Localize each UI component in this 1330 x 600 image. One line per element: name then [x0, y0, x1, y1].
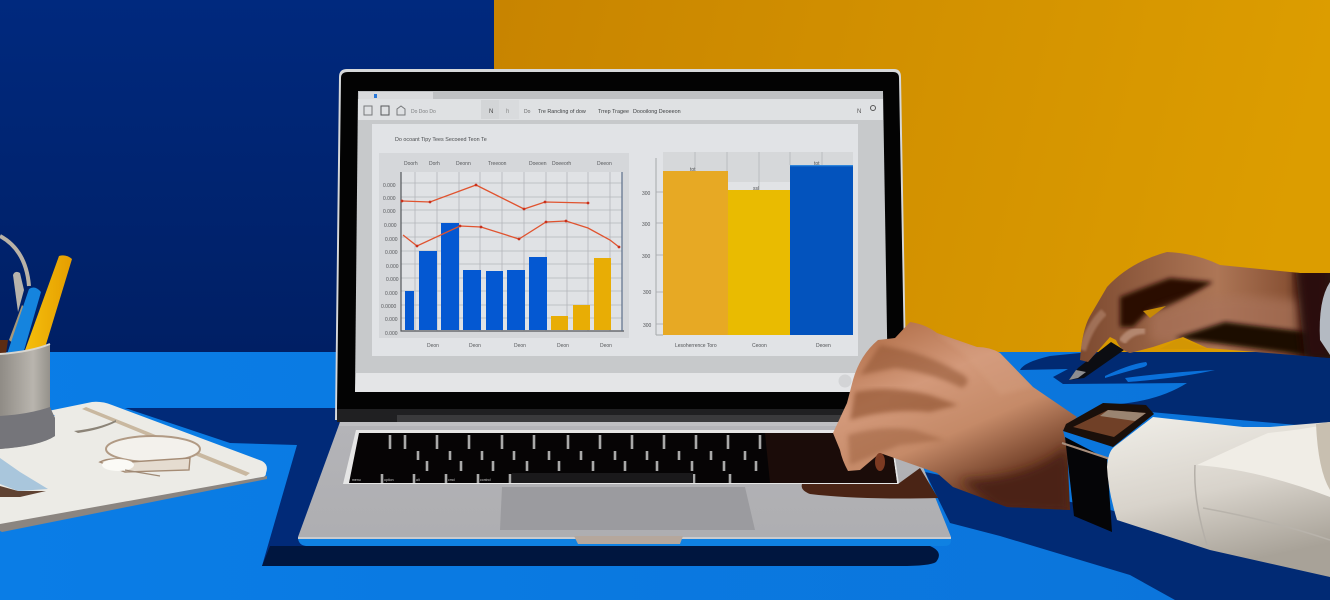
keyboard: cmd [448, 478, 455, 482]
toolbar: N [857, 109, 861, 115]
bar labels: 300 [642, 191, 651, 197]
chart labels: Dorh [429, 161, 440, 167]
bar labels: tot [814, 161, 820, 167]
metal cup [0, 344, 55, 449]
trackpad [500, 487, 755, 530]
yellow bar [728, 190, 791, 335]
chart labels: 0.000 [383, 209, 396, 215]
watch [1062, 403, 1154, 532]
chart labels: Doeeorh [552, 161, 571, 167]
toolbar: Do Doo Do [411, 109, 436, 115]
bar labels: 300 [642, 254, 651, 260]
bar labels: 300 [642, 222, 651, 228]
chart labels: 0.000 [385, 317, 398, 323]
strap [1065, 437, 1112, 532]
bar labels: Ceoon [752, 343, 767, 349]
bar labels: 300 [643, 290, 652, 296]
desk surface [0, 352, 1330, 600]
icon: blue folded paper [0, 458, 48, 491]
toolbar: Trrep Tragee [598, 109, 629, 115]
chart labels: 0.0000 [381, 304, 397, 310]
pen holder with pens [0, 236, 72, 449]
chart labels [381, 161, 612, 349]
finger shading [848, 333, 1070, 512]
bar labels [642, 161, 831, 349]
toolbar: Tre Rancling of dow [538, 109, 586, 115]
chart labels: 0.000 [383, 196, 396, 202]
chart labels: Deon [469, 343, 481, 349]
blue marker [7, 288, 41, 354]
bar labels: 300 [643, 323, 652, 329]
fingertip [875, 453, 885, 471]
toolbar: Do [524, 109, 531, 115]
chart labels: 0.000 [383, 183, 396, 189]
toolbar: h [506, 109, 509, 115]
laptop [298, 69, 951, 546]
gold bars [551, 258, 611, 330]
laptop base [298, 422, 951, 546]
keyboard: menu [352, 478, 361, 482]
chart labels: 0.000 [386, 264, 399, 270]
chart labels: 0.000 [385, 237, 398, 243]
red line series [402, 185, 619, 247]
hand: holding pen [1069, 252, 1330, 380]
laptop screen [355, 91, 888, 392]
toolbar [364, 100, 876, 119]
chart labels: Deon [514, 343, 526, 349]
chart labels: 0.000 [385, 250, 398, 256]
chart labels: Deon [557, 343, 569, 349]
keyboard [343, 430, 899, 484]
yellow pencil [24, 255, 72, 353]
chart labels: 0.000 [386, 277, 399, 283]
keyboard: control [480, 478, 491, 482]
keyboard: alt [416, 478, 420, 482]
chart: three large bars [642, 152, 853, 349]
orange bar [663, 171, 728, 335]
bar labels: tot [690, 167, 696, 173]
shirt sleeve [1107, 417, 1330, 577]
notebook with glasses [0, 402, 267, 532]
brown pencil [0, 340, 8, 354]
background: gold wall [494, 0, 1330, 353]
front lip [298, 537, 951, 546]
report sheet [372, 124, 858, 356]
hinge band [337, 409, 905, 422]
watch body [1063, 403, 1154, 447]
pen [1069, 342, 1124, 380]
chart labels: Doeoen [529, 161, 547, 167]
icon: glasses [100, 436, 200, 476]
blue bars [405, 223, 547, 330]
chart labels: Deonn [456, 161, 471, 167]
chart labels: 0.000 [385, 331, 398, 337]
background: navy wall [0, 0, 494, 353]
toolbar: Doooilong Deoeeon [633, 109, 681, 115]
chart labels: Deeon [597, 161, 612, 167]
hand: typing [833, 322, 1077, 512]
report heading: Do ocoant Tipy Tees Secoeed Teon Te [395, 137, 487, 143]
blue bar [790, 165, 853, 335]
silver clip [0, 236, 29, 286]
chart labels: Doorh [404, 161, 418, 167]
hand shadow on deck [802, 468, 938, 498]
bar labels: Lesoherrence Toro [675, 343, 717, 349]
hand back [1080, 252, 1330, 362]
toolbar: N [489, 109, 493, 115]
cuff edge [1320, 282, 1330, 355]
chart labels: 0.000 [384, 223, 397, 229]
chart labels: Deon [600, 343, 612, 349]
laptop lid [335, 69, 907, 420]
chart labels: Treeoon [488, 161, 507, 167]
chart labels: 0.000 [385, 291, 398, 297]
desk shadows [125, 352, 1330, 600]
keyboard: option [384, 478, 394, 482]
chart: blue and gold bars with red lines [379, 153, 629, 349]
small gold gaps [1160, 338, 1207, 349]
chart labels: Deon [427, 343, 439, 349]
bar labels: Deoen [816, 343, 831, 349]
bar labels: ssl [753, 186, 759, 192]
